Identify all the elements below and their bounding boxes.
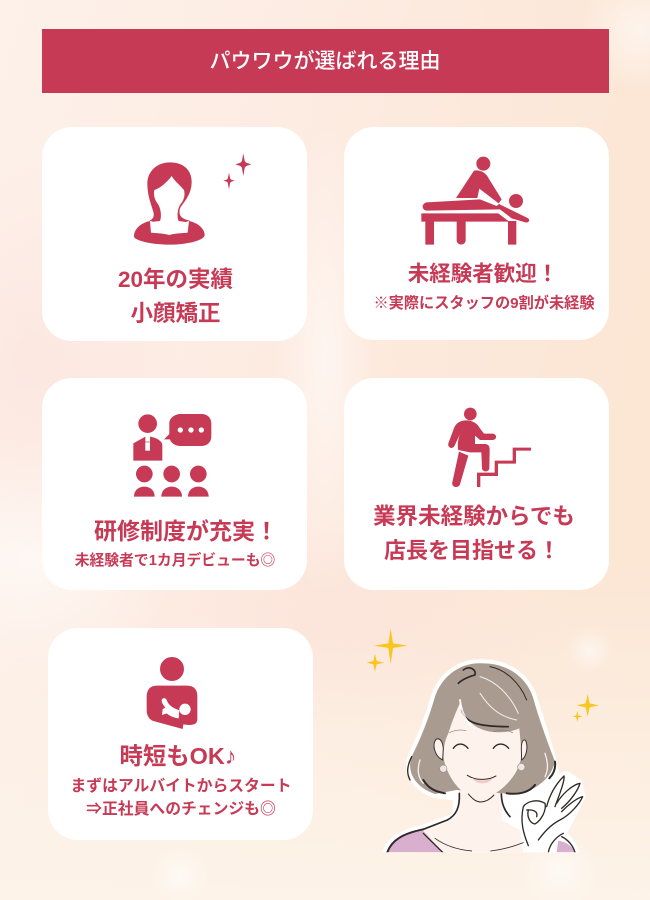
title banner: パウワウが選ばれる理由 <box>210 50 440 73</box>
hair <box>410 663 555 794</box>
icon: woman with sparkles <box>134 153 251 245</box>
icon: massage table <box>421 157 529 245</box>
hair highlights <box>418 677 547 783</box>
panel: beginners welcome <box>344 127 609 340</box>
ears <box>434 739 443 760</box>
panel text: beginners welcome: 未経験者歓迎！ <box>408 262 558 286</box>
panel text: training: 研修制度が充実！ <box>94 518 278 544</box>
panel text: career up <box>373 504 575 563</box>
gold sparkles <box>367 628 599 722</box>
panel: part-time <box>48 628 313 840</box>
panel: 20 years of experience <box>42 127 307 341</box>
panel text: beginners welcome <box>373 262 595 312</box>
panel text: career up: 店長を目指せる！ <box>384 538 560 563</box>
panel text: beginners welcome: ※実際にスタッフの9割が未経験 <box>373 294 595 312</box>
earrings <box>440 765 447 772</box>
line art <box>387 667 583 852</box>
panel text: part-time <box>70 743 292 818</box>
panel text: 20 years <box>118 267 234 326</box>
icon: person holding baby <box>147 657 197 729</box>
title banner <box>42 29 609 93</box>
panel text: 20 years: 小顔矯正 <box>130 301 221 326</box>
panel text: career up: 業界未経験からでも <box>373 504 575 529</box>
panel text: part-time: 時短もOK♪ <box>120 743 236 769</box>
panel: training <box>42 378 307 590</box>
illustration: smiling woman with gold sparkles <box>367 628 599 852</box>
icon: instructor and students <box>133 414 211 497</box>
panel text: 20 years: 20年の実績 <box>118 267 234 292</box>
panel text: part-time: まずはアルバイトからスタート <box>70 777 292 795</box>
mouth <box>472 778 493 783</box>
top <box>387 829 443 852</box>
face <box>443 702 522 802</box>
panel text: part-time: ⇒正社員へのチェンジも◎ <box>86 800 276 818</box>
skin <box>423 787 523 852</box>
panel: career up <box>344 378 609 590</box>
white halo outline <box>387 663 582 852</box>
panel text: training <box>75 518 278 569</box>
icon: person climbing stairs <box>448 408 531 487</box>
panel text: training: 未経験者で1カ月デビューも◎ <box>75 551 275 569</box>
